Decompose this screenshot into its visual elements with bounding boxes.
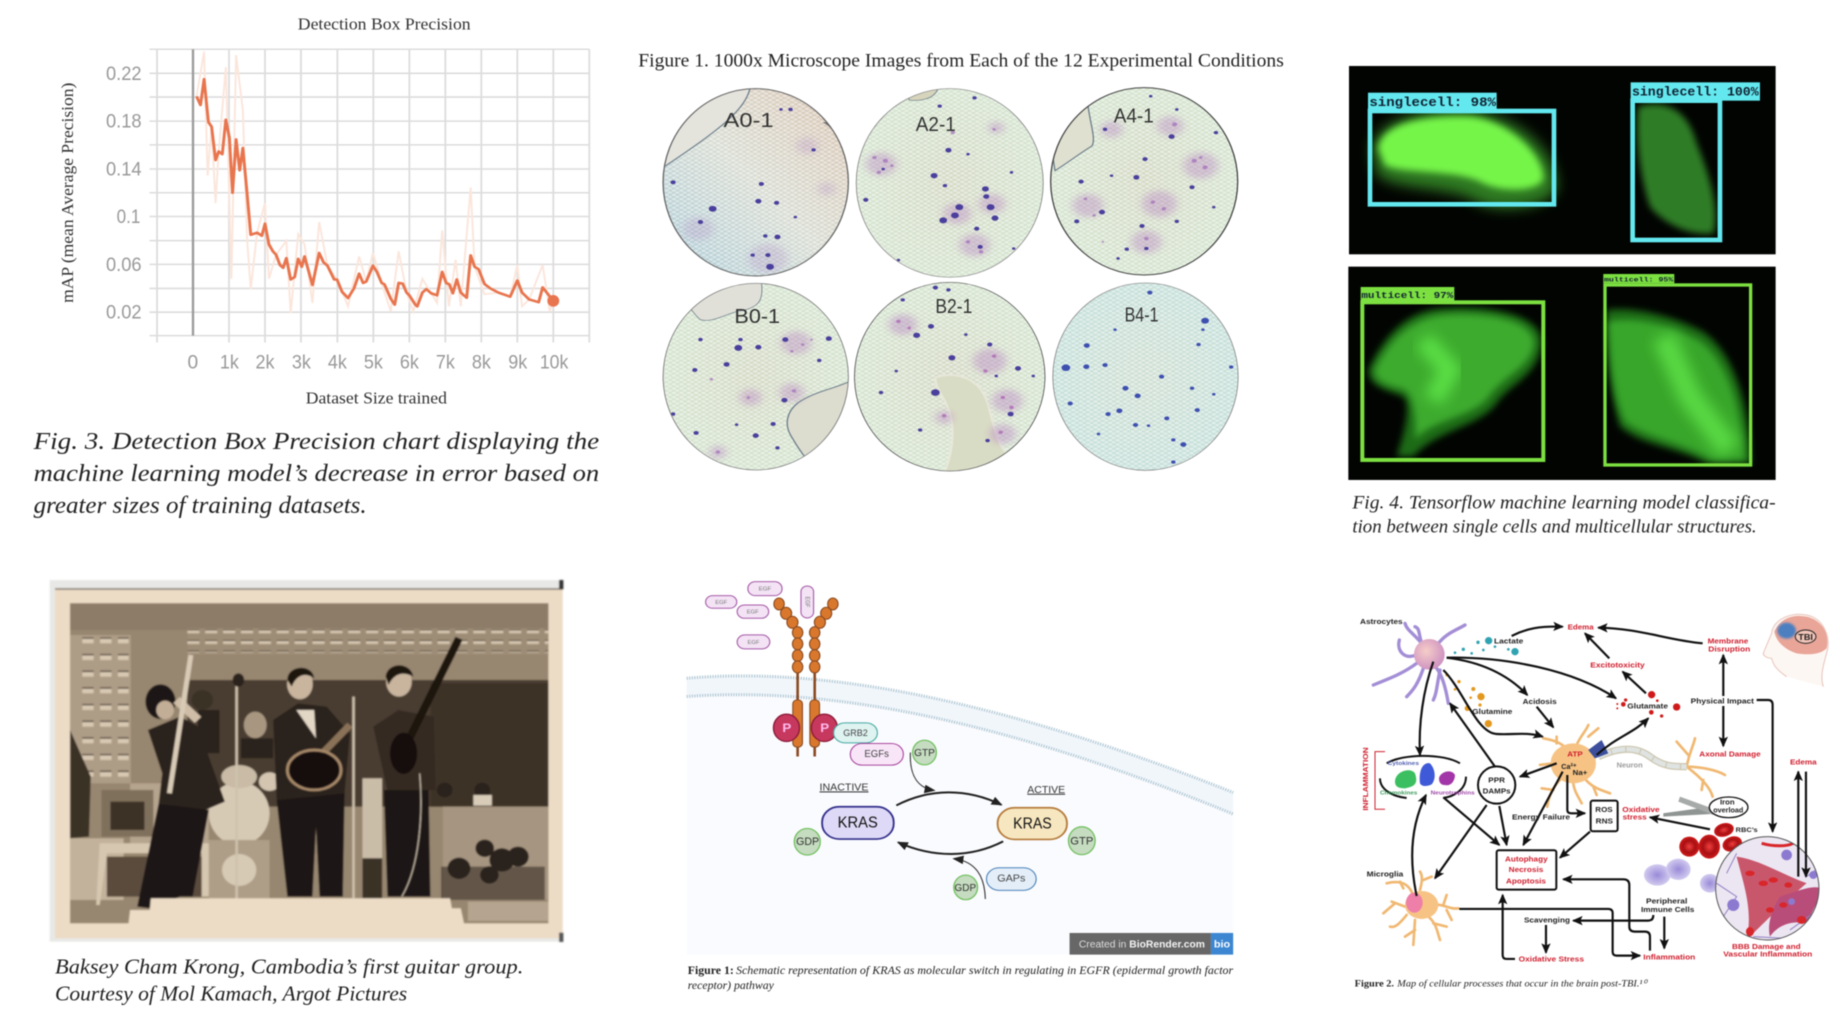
black process labels: RBC’s [1736, 827, 1758, 834]
black process labels [1360, 617, 1758, 925]
black process labels: Microglia [1367, 870, 1404, 879]
GTP on active KRAS [1068, 827, 1095, 855]
ROS RNS box: RNS [1596, 816, 1613, 825]
detection box 97% [1361, 287, 1543, 460]
end point marker [547, 295, 559, 307]
EGF ligands: EGF [759, 587, 772, 593]
caption: figure 3 [33, 427, 599, 519]
y-axis tick labels: 0.14 [106, 159, 142, 180]
detection box 98% [1368, 93, 1554, 204]
x-axis tick labels: 9k [508, 352, 528, 373]
detection box 97%: multicell: 97% [1361, 290, 1454, 301]
x-axis tick labels: 6k [400, 352, 419, 373]
arrow: inactivation [898, 841, 1003, 854]
line chart [106, 49, 589, 373]
micrograph A4-1 [1048, 88, 1238, 275]
black process labels: Energy Failure [1512, 812, 1570, 821]
image: multicellular structures [1348, 267, 1776, 480]
x-axis tick labels: 8k [472, 352, 491, 373]
micrograph B0-1 [663, 282, 855, 470]
EGFs label: EGFs [864, 749, 889, 760]
micrograph B4-1 [1053, 283, 1238, 470]
phosphate groups [774, 714, 837, 741]
PPR DAMPs node: PPR [1488, 776, 1505, 785]
detection box 100% [1631, 82, 1760, 240]
y-axis tick labels: 0.1 [117, 206, 140, 228]
blood vessel magnified view [1716, 837, 1823, 940]
glutamine particles [1445, 674, 1492, 727]
panel: detection box precision chart [33, 15, 599, 519]
EGFs label [850, 743, 903, 765]
red outcome labels: Vascular Inflammation [1723, 949, 1813, 958]
red outcome labels: stress [1623, 813, 1647, 822]
handwritten label A0-1: A0-1 [724, 109, 774, 131]
black process labels: Peripheral [1646, 897, 1687, 906]
active label: ACTIVE [1027, 784, 1065, 796]
icon: astrocyte [1373, 623, 1465, 703]
heading: figure 1: Figure 1. 1000x Microscope Images from Each of the 12 Experimental Conditions [638, 49, 1284, 71]
handwritten label A4-1: A4-1 [1114, 105, 1154, 127]
KRAS inactive: KRAS [838, 814, 878, 831]
EGF ligands: EGF [748, 640, 760, 646]
cell interior and membrane [687, 676, 1233, 955]
caption: figure 1 [688, 964, 1234, 992]
icon: microglia [1383, 872, 1458, 945]
red outcome labels: Edema [1568, 622, 1594, 631]
panel: guitar group photograph [50, 580, 563, 1005]
BioRender badge [1070, 933, 1233, 955]
GDP released [954, 875, 978, 900]
black process labels: Glutamate [1627, 701, 1668, 710]
handwritten label B0-1: B0-1 [734, 305, 780, 327]
caption: figure 1: receptor) pathway [688, 979, 775, 992]
detection box 100%: singlecell: 100% [1632, 84, 1759, 99]
micrograph A2-1 [856, 89, 1043, 277]
x-axis tick labels: 10k [540, 352, 569, 373]
y-axis tick labels: 0.22 [106, 63, 142, 84]
x-axis tick labels: 5k [364, 352, 383, 373]
seated crowd [437, 783, 545, 900]
lactate particles [1454, 637, 1519, 655]
stage steps [128, 898, 464, 925]
EGFR receptor dimer [774, 598, 838, 756]
red outcome labels: Excitotoxicity [1590, 661, 1645, 670]
red outcome labels: Membrane [1708, 637, 1748, 646]
cell death box: Necrosis [1509, 865, 1543, 874]
GTP incoming [913, 740, 936, 765]
red outcome labels [1519, 622, 1817, 964]
icon: TBI head [1763, 614, 1828, 687]
GAPs [986, 868, 1036, 890]
photograph [50, 580, 563, 942]
text: ATP and ions: ATP [1567, 750, 1583, 759]
detection box 95% [1603, 274, 1751, 465]
detection box 95%: multicell: 95% [1604, 275, 1673, 283]
red outcome labels: Oxidative Stress [1519, 955, 1584, 964]
drummer and background figure [192, 690, 273, 758]
glutamate particles [1616, 691, 1680, 718]
PPR DAMPs node [1478, 766, 1515, 804]
caption: figure 2: Figure 2. [1355, 979, 1394, 990]
caption: figure 3: greater sizes of training datasets. [34, 491, 367, 519]
detection box 98%: singlecell: 98% [1369, 95, 1496, 110]
BioRender badge: bio [1214, 939, 1231, 950]
single cell dim blob [1637, 104, 1715, 234]
caption: figure 4: tion between single cells and multicellular structures. [1352, 516, 1757, 537]
red outcome labels: Edema [1790, 758, 1817, 767]
PPR DAMPs node: DAMPs [1483, 786, 1511, 795]
GRB2 adaptor: GRB2 [843, 728, 868, 739]
caption: figure 2: Map of cellular processes that occur in the brain post-TBI.¹⁰ [1396, 979, 1649, 990]
black process labels: Immune Cells [1641, 905, 1694, 914]
iron overload: Iron [1720, 797, 1735, 806]
x-axis tick labels: 1k [220, 352, 239, 373]
GTP incoming: GTP [914, 747, 935, 759]
GDP on inactive KRAS [794, 828, 820, 855]
icon: neuron [1540, 725, 1725, 807]
arrow: activation [896, 792, 1001, 805]
micrograph A0-1 [659, 86, 855, 276]
panel: microscope images [638, 49, 1284, 474]
drum kit [209, 765, 280, 898]
cytokine cluster: Neurotrophins [1431, 790, 1475, 796]
handwritten label A2-1: A2-1 [916, 113, 956, 135]
micrograph B2-1 [854, 282, 1045, 474]
guitarist left [137, 655, 225, 908]
KRAS inactive [822, 807, 894, 839]
arrow: GTP entry [910, 752, 934, 790]
chart title: Detection Box Precision [298, 15, 471, 33]
EGF ligands: EGF [747, 610, 759, 616]
black process labels: Astrocytes [1360, 617, 1403, 626]
KRAS active [998, 808, 1067, 839]
guitarist centre [273, 668, 350, 897]
x-axis label: Dataset Size trained [306, 389, 447, 407]
iron overload [1663, 797, 1748, 818]
inactive label: INACTIVE [820, 782, 868, 793]
icon: TBI head: TBI [1798, 632, 1813, 642]
text: ATP and ions: Ca²⁺ [1561, 762, 1577, 771]
arrow: GDP release [954, 859, 985, 899]
caption: Baksey Cham Krong [55, 954, 523, 1005]
cell death box: Apoptosis [1506, 876, 1546, 885]
text: ATP and ions: Na+ [1573, 768, 1588, 777]
EGF ligands [706, 582, 814, 649]
red outcome labels: Axonal Damage [1699, 749, 1761, 758]
phosphate groups: P [782, 721, 792, 735]
caption: figure 1: Figure 1: [688, 964, 734, 977]
inflammation bracket: INFLAMMATION [1363, 747, 1370, 811]
caption: figure 4 [1351, 492, 1776, 537]
black process labels: Acidosis [1523, 697, 1557, 706]
single cell bright blob [1372, 110, 1557, 208]
panel: post-TBI cellular process map [1355, 614, 1828, 990]
cell death box: Autophagy [1505, 854, 1548, 863]
GTP on active KRAS: GTP [1070, 836, 1093, 848]
y-axis tick labels [106, 63, 142, 323]
GRB2 adaptor [834, 723, 877, 743]
caption: Baksey Cham Krong: Courtesy of Mol Kamach, Argot Pictures [55, 981, 407, 1005]
multicell blob left [1368, 308, 1542, 457]
x-axis tick labels: 7k [436, 352, 455, 373]
inflammation bracket [1363, 747, 1385, 811]
multicell blob right [1607, 309, 1751, 463]
data line [197, 79, 553, 306]
black process labels: Glutamine [1472, 707, 1512, 716]
conga and microphone stands [233, 673, 382, 900]
x-axis tick labels [187, 352, 569, 373]
EGF ligands: EGF [715, 600, 727, 606]
y-axis tick labels: 0.06 [106, 254, 142, 276]
iron overload: overload [1713, 805, 1744, 814]
red outcome labels: Disruption [1708, 644, 1751, 653]
handwritten label B4-1: B4-1 [1125, 303, 1159, 326]
black process labels: Physical Impact [1691, 696, 1754, 705]
guitarist right [373, 638, 459, 897]
x-axis tick labels: 3k [292, 352, 311, 373]
text: ATP and ions [1561, 750, 1588, 777]
handwritten label B2-1: B2-1 [935, 295, 972, 317]
panel: fluorescence classification [1348, 66, 1776, 537]
process arrows [1412, 627, 1806, 959]
x-axis tick labels: 2k [255, 352, 275, 373]
y-axis tick labels: 0.18 [106, 111, 142, 132]
red blood cells [1679, 821, 1744, 859]
red outcome labels: BBB Damage and [1732, 942, 1801, 951]
x-axis tick labels: 0 [187, 352, 198, 373]
red outcome labels: Oxidative [1622, 805, 1660, 814]
caption: Baksey Cham Krong: Baksey Cham Krong, Cambodia’s first guitar group. [55, 954, 523, 978]
caption: figure 1: Schematic representation of KRAS as molecular switch in regulating in EGFR (epidermal growth factor [736, 964, 1234, 977]
ROS RNS box [1591, 801, 1618, 831]
caption: figure 3: machine learning model’s decrease in error based on [34, 459, 599, 487]
y-axis label: mAP (mean Average Precision) [59, 83, 77, 303]
black process labels: Neuron [1617, 762, 1643, 769]
GDP released: GDP [955, 883, 976, 894]
BioRender badge: Created in BioRender.com [1079, 939, 1205, 950]
phosphate groups: P [820, 721, 830, 735]
black process labels: Scavenging [1524, 916, 1570, 925]
GAPs: GAPs [997, 873, 1025, 885]
panel: KRAS signalling schematic [687, 582, 1234, 992]
red outcome labels: Inflammation [1643, 952, 1696, 961]
caption: figure 3: Fig. 3. Detection Box Precision chart displaying the [33, 427, 599, 455]
cytokine cluster [1380, 756, 1475, 798]
cytokine cluster: Chemokines [1380, 790, 1417, 796]
image: single cells [1349, 66, 1776, 254]
KRAS active: KRAS [1013, 815, 1052, 832]
y-axis tick labels: 0.02 [106, 302, 142, 323]
black process labels: Lactate [1494, 636, 1523, 645]
ROS RNS box: ROS [1595, 805, 1613, 814]
cytokine cluster: Cytokines [1388, 761, 1419, 767]
x-axis tick labels: 4k [328, 352, 347, 373]
GDP on inactive KRAS: GDP [796, 837, 819, 848]
white blood cells [1644, 859, 1720, 893]
caption: figure 4: Fig. 4. Tensorflow machine learning model classifica- [1351, 492, 1776, 513]
cell death box [1497, 850, 1556, 890]
EGF ligands: EGF [803, 597, 810, 608]
